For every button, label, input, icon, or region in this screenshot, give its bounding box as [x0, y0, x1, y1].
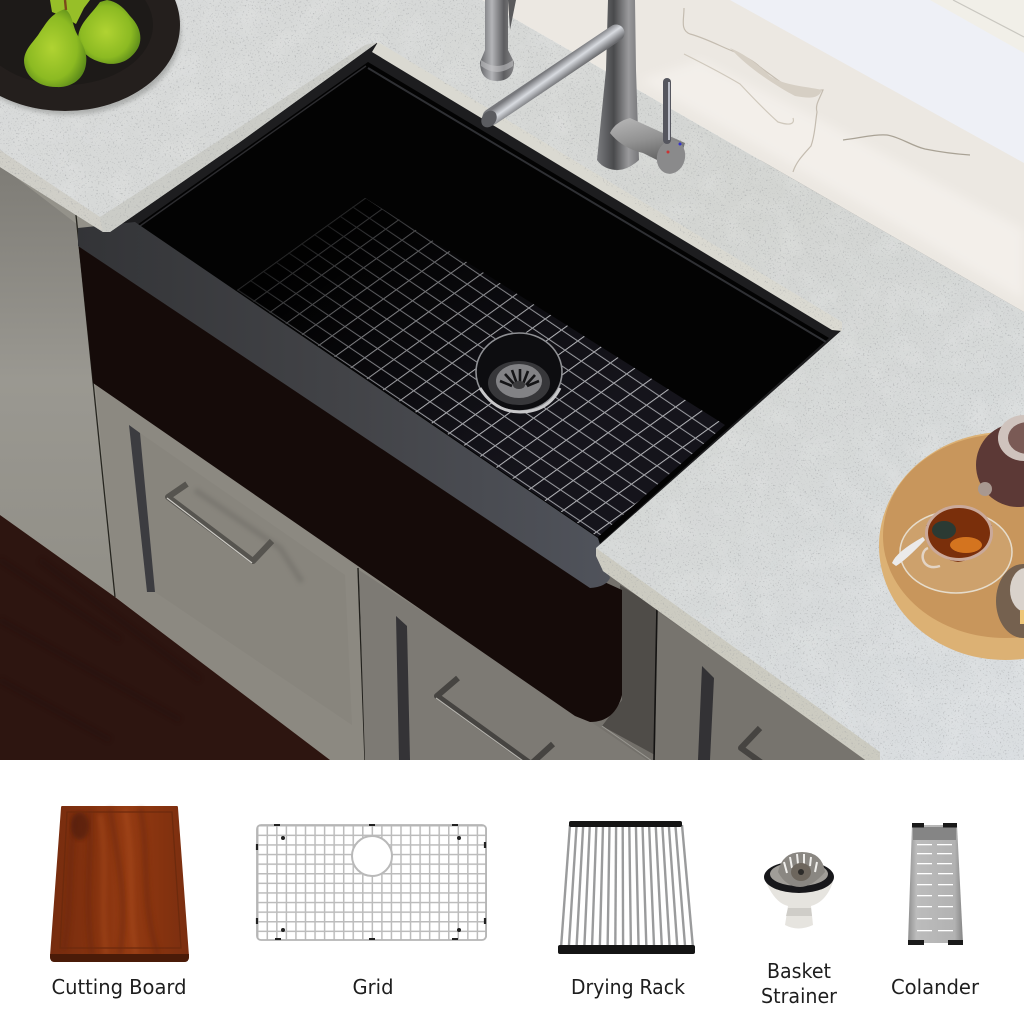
pull-down sprayer: [480, 0, 516, 81]
accessory: cutting board: [50, 806, 189, 962]
third drawer handle: [738, 726, 762, 760]
plate with pears: [0, 0, 181, 115]
wooden tray with tea set: [879, 415, 1024, 660]
countertop front edge bands: [0, 150, 108, 232]
third drawer: [683, 630, 818, 760]
accessory: basket strainer: [764, 852, 834, 928]
spoon: [892, 537, 925, 566]
label: Cutting Board: Cutting Board: [52, 975, 186, 999]
drain strainer in sink: [476, 332, 562, 412]
tea cup: [923, 505, 993, 567]
sink floor: [352, 268, 725, 537]
second drawer handle: [437, 678, 553, 764]
faucet: [478, 0, 689, 177]
label: Colander: Colander: [891, 975, 980, 999]
accessory: sink grid: [257, 825, 487, 940]
wooden floor: [0, 515, 330, 760]
second drawer: [359, 570, 650, 762]
spout arm: [478, 33, 616, 130]
sink apron front: [78, 240, 622, 722]
teapot: [976, 415, 1024, 507]
pear: left: [24, 9, 86, 87]
sink front rim: [78, 222, 610, 588]
wall: marble backsplash: [482, 0, 1024, 312]
accessory: colander: [908, 823, 963, 945]
side panel next to apron: [602, 585, 657, 755]
first drawer handle: [168, 484, 272, 561]
label: Drying Rack: Drying Rack: [571, 975, 685, 999]
window: [730, 0, 1024, 163]
label: Basket Strainer: Basket: [767, 959, 831, 983]
label: Basket Strainer: Strainer: [761, 984, 838, 1008]
countertop: [0, 0, 1024, 762]
wire grid in sink: [237, 198, 725, 537]
first drawer: [95, 382, 365, 760]
first drawer handle shadow: [195, 490, 302, 582]
lever handle: [610, 82, 689, 177]
pear: back: [50, 0, 90, 24]
accessory: drying rack: [558, 821, 695, 954]
left cabinet door: [0, 167, 80, 288]
small glass jar: [996, 564, 1024, 638]
kitchen photo scene: [0, 0, 1024, 766]
cabinets: [0, 160, 1024, 766]
pear: right: [78, 0, 140, 64]
faucet body: [597, 0, 639, 170]
label: Grid: Grid: [352, 975, 394, 999]
sink interior: [100, 40, 842, 548]
rim ledge lines: [368, 68, 826, 342]
glass saucer: [900, 511, 1012, 593]
